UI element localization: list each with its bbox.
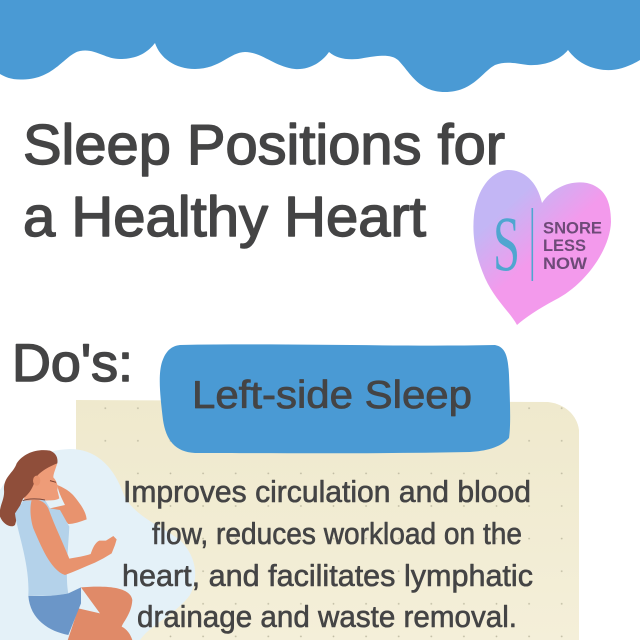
logo: Snore Less Now heart	[473, 170, 611, 325]
body text: drainage and waste removal.	[137, 599, 517, 634]
back arm under head	[50, 485, 87, 524]
logo wordmark	[543, 220, 602, 273]
top wave banner	[0, 0, 640, 92]
face and neck	[23, 463, 59, 510]
ear	[33, 476, 40, 486]
heading: Do's: Do's:	[12, 334, 133, 393]
logo divider	[532, 208, 533, 281]
closed eye	[50, 481, 56, 482]
tank top	[15, 500, 69, 596]
logo wordmark: SNORE	[543, 220, 602, 238]
body text: Improves circulation and blood	[123, 474, 531, 509]
arm and hand	[30, 500, 117, 575]
body text: flow, reduces workload on the	[152, 516, 522, 551]
title	[23, 113, 505, 249]
background blob	[0, 449, 195, 640]
label: Left-side Sleep	[160, 344, 510, 453]
label: Left-side Sleep: Left-side Sleep	[192, 374, 472, 417]
logo wordmark: NOW	[543, 255, 587, 273]
logo wordmark: LESS	[543, 237, 586, 255]
illustration: woman sleeping on left side	[0, 449, 195, 640]
body text	[122, 474, 533, 634]
title: a Healthy Heart	[23, 185, 426, 249]
body text: heart, and facilitates lymphatic	[122, 558, 533, 593]
title: Sleep Positions for	[23, 113, 505, 177]
hair	[0, 450, 58, 526]
strap	[23, 499, 45, 501]
shorts	[28, 587, 81, 635]
logo S monogram: S	[493, 200, 520, 287]
thigh	[67, 587, 133, 640]
panel: notebook card	[76, 400, 579, 640]
